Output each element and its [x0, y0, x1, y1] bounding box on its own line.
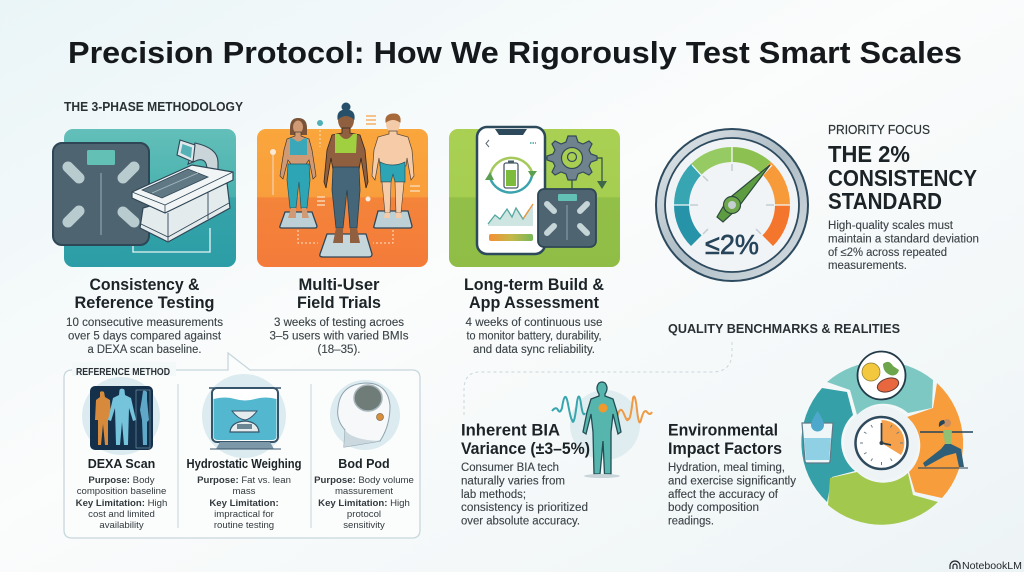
- block: inherent BIA variance: consistency is prioritized: [461, 502, 588, 514]
- label: reference method: REFERENCE METHOD: [76, 367, 170, 378]
- block: phase 3 text: to monitor battery, durability,: [466, 330, 602, 342]
- chart: environmental factors cycle: [801, 352, 973, 525]
- block: phase 1 text: Reference Testing: [74, 294, 214, 312]
- block: phase 2 text: Field Trials: [297, 294, 381, 312]
- panel: reference method: [64, 353, 420, 538]
- block: environmental impact factors: affect the accuracy of: [668, 489, 779, 501]
- icon: yoga figure: [918, 419, 973, 468]
- title: Precision Protocol: How We Rigorously Test Smart Scales: [68, 35, 962, 70]
- icon: small scale: [538, 189, 596, 247]
- column: DEXA scan: Key Limitation: High: [76, 498, 167, 509]
- column: bod pod: sensitivity: [343, 520, 385, 531]
- block: inherent BIA variance: over absolute accuracy.: [461, 516, 580, 528]
- icon: clock: [856, 417, 908, 469]
- block: priority focus: [828, 122, 979, 272]
- block: environmental impact factors: Hydration, meal timing,: [668, 462, 785, 474]
- column: hydrostatic weighing: Hydrostatic Weighing: [186, 457, 302, 471]
- block: inherent BIA variance: lab methods;: [461, 489, 526, 501]
- column: DEXA scan: composition baseline: [77, 486, 166, 497]
- column: bod pod: Purpose: Body volume: [314, 475, 414, 486]
- block: phase 3 text: 4 weeks of continuous use: [466, 317, 602, 329]
- block: phase 3 text: Long-term Build &: [464, 276, 604, 294]
- icon: body with BIA waves: [552, 382, 652, 478]
- icon: gear: [547, 136, 597, 180]
- block: phase 1 text: over 5 days compared against: [68, 330, 222, 342]
- panel: phase 3 illustration: [449, 127, 620, 267]
- gauge: 2% consistency: [656, 129, 808, 281]
- block: phase 1 text: 10 consecutive measurements: [66, 317, 223, 329]
- person: woman on scale, centre: [320, 102, 372, 257]
- gauge value: ≤2%: [705, 229, 759, 260]
- block: phase 2 text: 3–5 users with varied BMIs: [270, 330, 409, 342]
- column: hydrostatic weighing: [186, 374, 302, 531]
- person: woman on scale, left: [280, 118, 317, 228]
- block: inherent BIA variance: naturally varies from: [461, 476, 565, 488]
- watermark: NotebookLM: NotebookLM: [962, 560, 1022, 572]
- column: bod pod: massurement: [335, 486, 393, 497]
- block: priority focus: measurements.: [828, 260, 907, 272]
- block: phase 1 text: [66, 276, 223, 356]
- block: priority focus: THE 2%: [828, 141, 910, 167]
- column: bod pod: protocol: [347, 509, 381, 520]
- icon: smart scale: [53, 143, 149, 245]
- heading: the 3-phase methodology: THE 3-PHASE METHODOLOGY: [64, 100, 244, 114]
- block: inherent BIA variance: [461, 422, 590, 528]
- block: phase 3 text: [464, 276, 604, 356]
- block: environmental impact factors: Impact Factors: [668, 440, 782, 458]
- icon: phone with app: [477, 127, 545, 254]
- block: priority focus: PRIORITY FOCUS: [828, 122, 930, 137]
- panel: phase 1 illustration: [53, 129, 236, 267]
- block: environmental impact factors: Environmental: [668, 422, 778, 440]
- column: hydrostatic weighing: Purpose: Fat vs. lean: [197, 475, 291, 486]
- block: priority focus: CONSISTENCY: [828, 165, 977, 191]
- block: phase 1 text: a DEXA scan baseline.: [88, 344, 202, 356]
- block: inherent BIA variance: Inherent BIA: [461, 422, 560, 440]
- column: bod pod: Bod Pod: [338, 457, 390, 471]
- column: hydrostatic weighing: routine testing: [214, 520, 274, 531]
- block: phase 3 text: App Assessment: [469, 294, 599, 312]
- icon: meal plate: [858, 352, 906, 400]
- block: environmental impact factors: and exercise significantly: [668, 476, 796, 488]
- block: phase 1 text: Consistency &: [90, 276, 200, 294]
- column: hydrostatic weighing: impractical for: [214, 509, 275, 520]
- block: phase 2 text: 3 weeks of testing acroes: [274, 317, 404, 329]
- block: priority focus: High-quality scales must: [828, 220, 954, 232]
- block: inherent BIA variance: Variance (±3–5%): [461, 440, 590, 458]
- panel: phase 2 illustration: [257, 102, 428, 267]
- block: environmental impact factors: body composition: [668, 502, 759, 514]
- block: priority focus: of ≤2% across repeated: [828, 247, 947, 259]
- column: hydrostatic weighing: mass: [233, 486, 256, 497]
- icon: water glass: [802, 411, 833, 463]
- column: bod pod: Key Limitation: High: [318, 498, 410, 509]
- column: DEXA scan: Purpose: Body: [88, 475, 155, 486]
- block: inherent BIA variance: Consumer BIA tech: [461, 462, 559, 474]
- block: environmental impact factors: [668, 422, 796, 528]
- heading: quality benchmarks: QUALITY BENCHMARKS & REALITIES: [668, 321, 900, 336]
- column: hydrostatic weighing: Key Limitation:: [209, 498, 279, 509]
- block: phase 2 text: Multi-User: [298, 276, 380, 294]
- block: phase 3 text: and data sync reliability.: [473, 344, 595, 356]
- block: environmental impact factors: readings.: [668, 516, 714, 528]
- block: phase 2 text: (18–35).: [318, 344, 360, 356]
- column: DEXA scan: availability: [99, 520, 144, 531]
- column: DEXA scan: cost and limited: [88, 509, 155, 520]
- column: DEXA scan: [76, 377, 167, 531]
- person: man on scale, right: [372, 114, 414, 228]
- block: phase 2 text: [270, 276, 409, 356]
- block: priority focus: maintain a standard deviation: [828, 234, 979, 246]
- column: bod pod: [314, 380, 414, 531]
- icon: DEXA machine: [132, 140, 233, 242]
- block: priority focus: STANDARD: [828, 188, 942, 214]
- column: DEXA scan: DEXA Scan: [88, 457, 155, 471]
- needle: [717, 165, 770, 222]
